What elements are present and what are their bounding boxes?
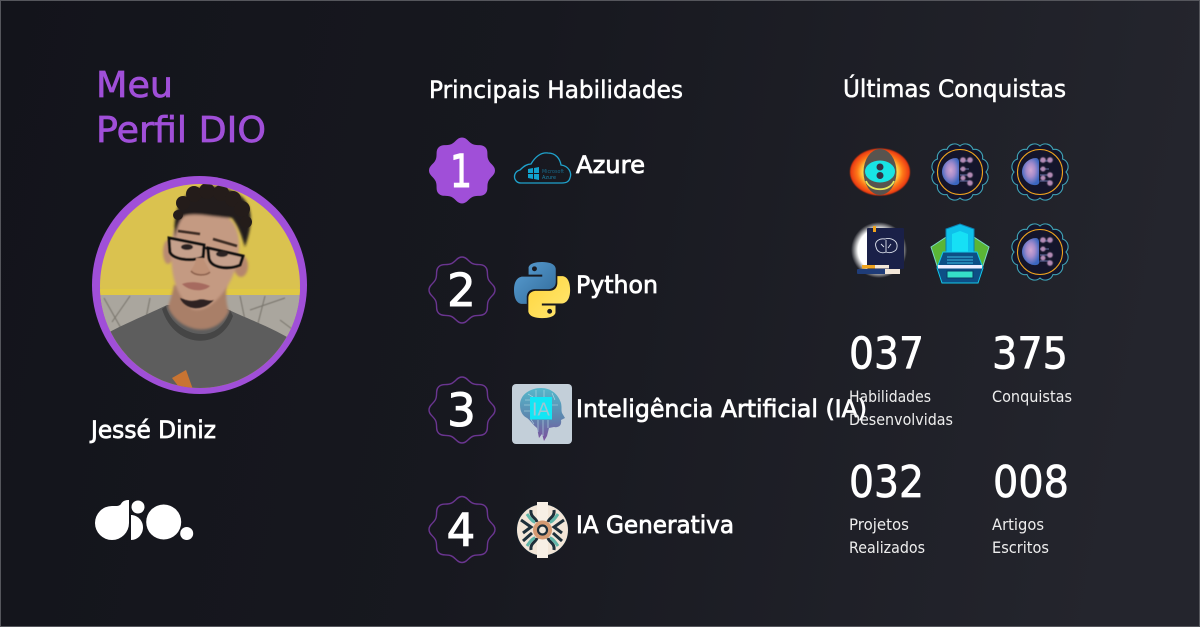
- stat: articles: Escritos: [992, 538, 1049, 557]
- badge 3: 3: [447, 384, 476, 437]
- panel: skills: [429, 76, 867, 562]
- profile photo: [90, 175, 310, 400]
- icon: azure cloud: Microsoft: [542, 169, 565, 175]
- achievements heading: Últimas Conquistas: [843, 73, 1066, 103]
- skill 1: Azure: [429, 138, 645, 204]
- icon: typewriter achievement: [931, 224, 989, 283]
- stat: abilities: [849, 328, 953, 429]
- stat: abilities: 037: [849, 328, 924, 380]
- icon: book achievement: [851, 222, 907, 278]
- skill 3: Inteligencia Artificial: [429, 377, 867, 444]
- icon: generative AI: [516, 502, 568, 558]
- icon: AI head: [512, 384, 572, 444]
- stat: projects: Projetos: [849, 515, 909, 534]
- stat: projects: 032: [849, 457, 924, 508]
- icon: azure cloud: Azure: [542, 175, 556, 181]
- title: Meu: [96, 65, 173, 106]
- icon: eye achievement: [850, 148, 910, 196]
- stat: articles: Artigos: [992, 515, 1044, 534]
- icon: brain badge: [932, 144, 988, 200]
- title: Perfil DIO: [96, 110, 266, 151]
- stat: projects: Realizados: [849, 538, 925, 557]
- skill 4: IA Generativa: [429, 496, 734, 562]
- stat: achievements: Conquistas: [992, 387, 1072, 406]
- icon: brain badge: [1012, 224, 1068, 280]
- name: Jessé Diniz: [89, 416, 216, 444]
- stat: achievements: 375: [992, 328, 1068, 380]
- stat: projects: [849, 457, 925, 557]
- skill 2: Python: [429, 257, 658, 323]
- stat: achievements: [992, 328, 1072, 406]
- panel: achievements: [843, 73, 1072, 557]
- skill name: Python: [576, 271, 658, 299]
- title: [96, 65, 266, 151]
- panel: profile: [89, 65, 310, 540]
- icon: brain badge: [1012, 144, 1068, 200]
- stat: articles: [992, 457, 1069, 557]
- stat: articles: 008: [993, 457, 1069, 508]
- skill name: IA Generativa: [576, 511, 734, 539]
- badge 4: [429, 496, 495, 562]
- icon: AI head: IA: [532, 400, 551, 420]
- badge 4: 4: [447, 504, 475, 557]
- badge 1: [429, 138, 495, 204]
- icon: python logo: [514, 262, 570, 318]
- stat: abilities: Habilidades: [849, 387, 931, 406]
- badge 2: [429, 257, 495, 323]
- badge 1: 1: [450, 145, 472, 198]
- badge 2: 2: [447, 264, 476, 317]
- skills heading: Principais Habilidades: [429, 76, 683, 104]
- badge 3: [429, 377, 495, 443]
- logo: dio: [95, 500, 193, 540]
- icon: azure cloud: [514, 153, 571, 183]
- skill name: Inteligência Artificial (IA): [576, 395, 867, 423]
- skill name: Azure: [576, 151, 645, 179]
- stat: abilities: Desenvolvidas: [849, 410, 953, 429]
